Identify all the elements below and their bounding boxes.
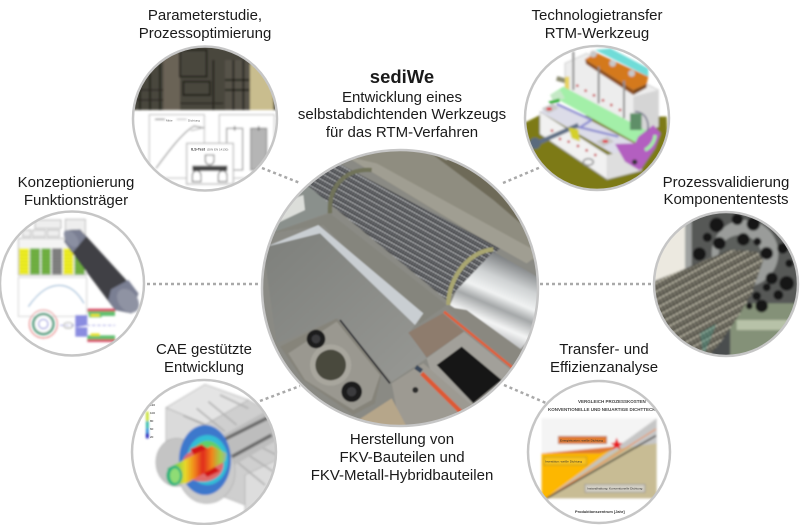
connector: left (147, 283, 260, 285)
label: Herstellung (311, 431, 493, 484)
chart labels: Investition: weiße Dichtung (545, 460, 582, 464)
chart labels: Instandhaltung: Konventionelle Dichtung (587, 486, 643, 490)
circle: process cost comparison chart (520, 375, 675, 525)
label: Herstellung: FKV-Metall-Hybridbauteilen (311, 467, 493, 484)
label: Prozessvalidierung: Prozessvalidierung (663, 174, 789, 191)
chart labels: Dichtung (188, 118, 200, 122)
connector: right (540, 283, 652, 285)
legend values: 60 (150, 427, 154, 431)
label: Transfer: Transfer- und (559, 341, 649, 358)
label: Parameterstudie: Prozessoptimierung (139, 25, 271, 42)
chart labels: Mitte (166, 118, 173, 122)
label: Prozessvalidierung: Komponententests (663, 191, 789, 208)
circle: Parameterstudie photo and charts (130, 40, 280, 196)
label: Herstellung: Herstellung von (350, 431, 454, 448)
chart labels (545, 438, 643, 514)
label: Prozessvalidierung (663, 174, 789, 208)
label: Konzeptionierung: Konzeptionierung (18, 174, 134, 191)
label: Technologietransfer: RTM-Werkzeug (545, 25, 649, 42)
label: Parameterstudie: Parameterstudie, (148, 7, 262, 24)
central photo: RTM tool with carbon tube (260, 150, 540, 430)
subtitle: project description: für das RTM-Verfahren (326, 124, 478, 141)
legend values: 120 (150, 403, 155, 407)
label: Technologietransfer (532, 7, 662, 42)
legend values: 100 (150, 411, 155, 415)
legend values: 20 (150, 435, 154, 439)
circle: carbon tube component test (652, 210, 800, 358)
label: CAE: Entwicklung (164, 359, 244, 376)
label: CAE: CAE gestützte (156, 341, 252, 358)
chart labels: ILS-Test (191, 148, 206, 152)
label: Konzeptionierung: Funktionsträger (24, 192, 128, 209)
chart title: VERGLEICH PROZESSKOSTEN (578, 399, 646, 404)
connector: top left (262, 168, 300, 183)
label: Technologietransfer: Technologietransfer (532, 7, 662, 24)
legend values: 80 (150, 419, 154, 423)
label: Konzeptionierung (18, 174, 134, 209)
label: Transfer (550, 341, 658, 376)
subtitle: project description: selbstabdichtenden Werkzeugs (298, 106, 506, 123)
label: Parameterstudie (139, 7, 271, 42)
label: Herstellung: FKV-Bauteilen und (339, 449, 465, 466)
circle: tube concept table and drawings (0, 210, 150, 360)
label: CAE (156, 341, 252, 376)
heading: sediWe: sediWe (370, 66, 434, 87)
circle: RTM tool CAD model (524, 44, 670, 192)
chart title (548, 400, 656, 411)
connector: top right (503, 167, 541, 183)
chart labels: (DIN EN 14130) (207, 148, 228, 152)
chart labels: Produktionszentrum [Jahr] (575, 509, 625, 514)
chart labels (166, 118, 228, 152)
chart labels: Energiekosten: weiße Dichtung (560, 438, 603, 442)
chart title: KONVENTIONELLE UND NEUARTIGE DICHTTECHNIK (548, 407, 664, 412)
label: Transfer: Effizienzanalyse (550, 359, 658, 376)
connector: bottom left (260, 386, 300, 401)
subtitle: project description (298, 89, 506, 141)
legend values (150, 404, 155, 438)
subtitle: project description: Entwicklung eines (342, 89, 462, 106)
connector: bottom right (504, 385, 546, 403)
circle: CAE simulation (130, 375, 280, 525)
